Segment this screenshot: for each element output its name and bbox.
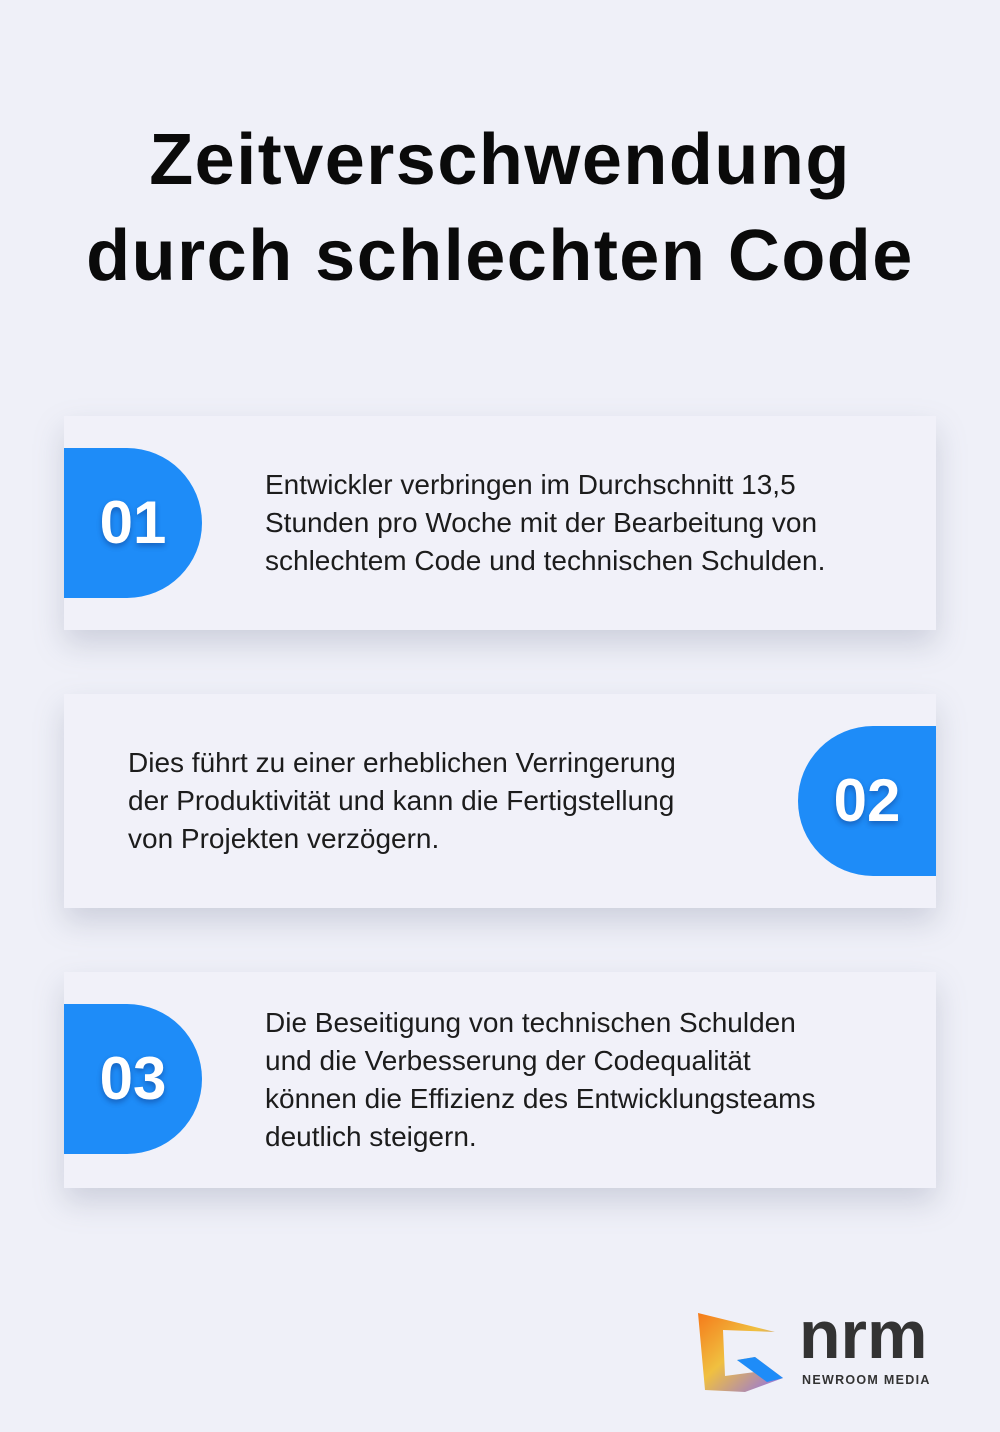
title: Zeitverschwendung	[149, 120, 851, 200]
title: durch schlechten Code	[86, 216, 914, 296]
panel: card 2	[64, 694, 936, 908]
panel: card 3	[64, 972, 936, 1188]
text 1: Entwickler verbringen im Durchschnitt 13,5 Stunden pro Woche mit der Bearbeitung von schlechtem Code und technischen Schulden.	[265, 469, 825, 576]
panel: card 1	[64, 416, 936, 630]
logo	[698, 1297, 931, 1392]
logo: NEWROOM MEDIA	[802, 1373, 931, 1387]
wordmark: nrm	[799, 1297, 927, 1373]
text 3: Die Beseitigung von technischen Schulden und die Verbesserung der Codequalität können die Effizienz des Entwicklungsteams deutlich steigern.	[265, 1007, 815, 1152]
badge 01	[64, 448, 202, 598]
icon: logo mark	[698, 1313, 783, 1392]
badge 03: 03	[100, 1045, 166, 1112]
title	[86, 120, 914, 296]
badge 02	[798, 726, 936, 876]
badge 02: 02	[834, 767, 900, 834]
badge 03	[64, 1004, 202, 1154]
badge 01: 01	[100, 489, 166, 556]
text 2: Dies führt zu einer erheblichen Verringerung der Produktivität und kann die Fertigstellung von Projekten verzögern.	[128, 747, 676, 854]
